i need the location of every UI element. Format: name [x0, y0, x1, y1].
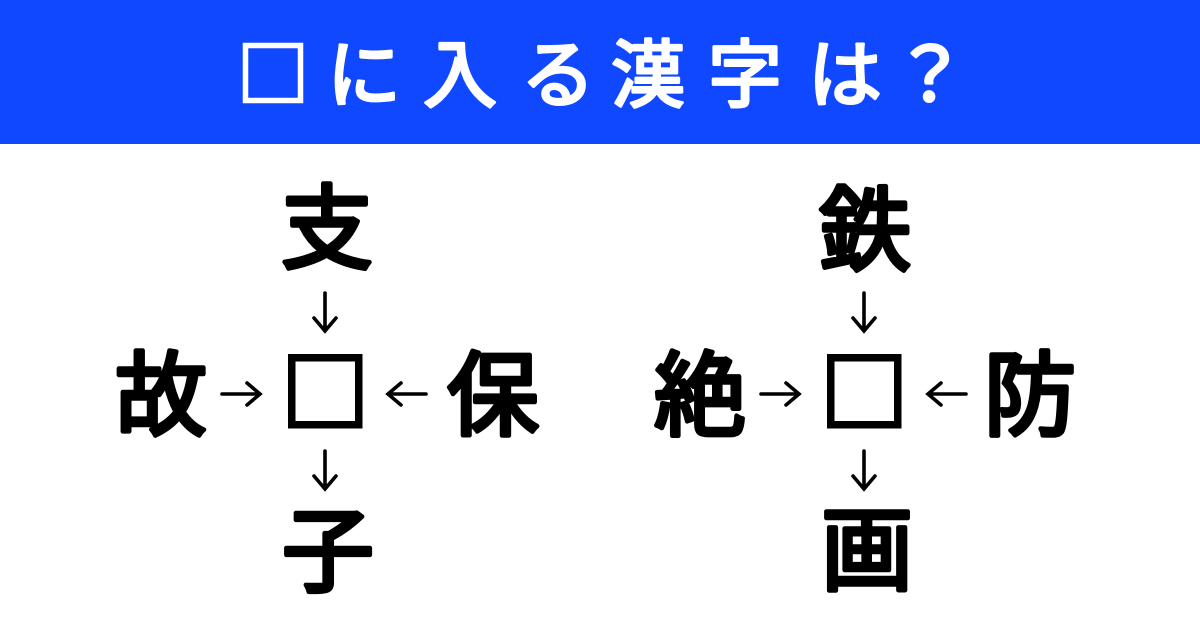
title blank box icon	[246, 46, 300, 100]
panel: left puzzle	[115, 179, 539, 604]
arrow down top	[314, 293, 336, 331]
title: に入る漢字は？	[327, 34, 967, 117]
bottom kanji: 子	[282, 502, 374, 604]
left kanji: 故	[115, 346, 207, 448]
arrow down bottom	[314, 451, 336, 489]
bottom kanji: 画	[821, 501, 913, 603]
right kanji: 防	[984, 346, 1076, 448]
arrow left	[388, 383, 426, 405]
arrow right	[761, 383, 799, 405]
top kanji: 鉄	[819, 181, 911, 283]
arrow down bottom	[853, 451, 875, 489]
center blank box	[292, 358, 359, 425]
top kanji: 支	[281, 179, 373, 281]
center blank box	[831, 358, 898, 425]
left kanji: 絶	[654, 346, 746, 448]
arrow right	[222, 383, 260, 405]
right kanji: 保	[447, 346, 539, 448]
arrow left	[928, 383, 966, 405]
title banner	[0, 0, 1200, 144]
arrow down top	[853, 293, 875, 331]
panel: right puzzle	[654, 181, 1076, 603]
